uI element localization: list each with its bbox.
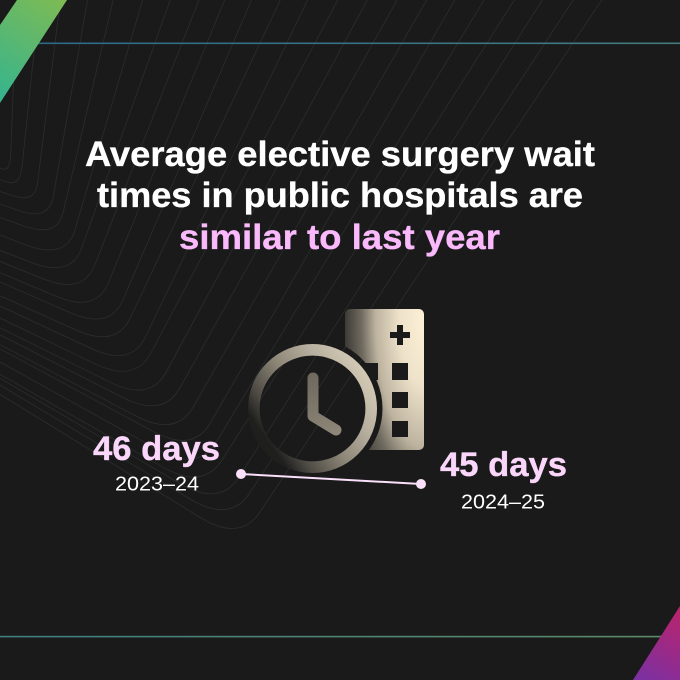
stat: 2023-24: 2023–24: [115, 474, 199, 496]
corner accent: magenta: [633, 606, 680, 680]
icon: hospital and clock: [254, 309, 424, 467]
stat: 2023-24: 46 days: [93, 430, 220, 468]
icon: clock hands: [313, 378, 336, 430]
stat: 2024-25: [440, 446, 567, 514]
connector line between years: [236, 469, 426, 489]
title: Average elective surgery wait: [85, 135, 595, 174]
title: [85, 135, 595, 257]
title: similar to last year: [179, 218, 500, 257]
corner accent: green: [0, 0, 67, 103]
icon: hospital building: [345, 309, 424, 450]
title: times in public hospitals are: [97, 176, 583, 215]
stat: 2023-24: [93, 430, 220, 496]
stat: 2024-25: 2024–25: [461, 492, 545, 514]
icon: clock ring: [254, 350, 371, 467]
stat: 2024-25: 45 days: [440, 446, 567, 484]
